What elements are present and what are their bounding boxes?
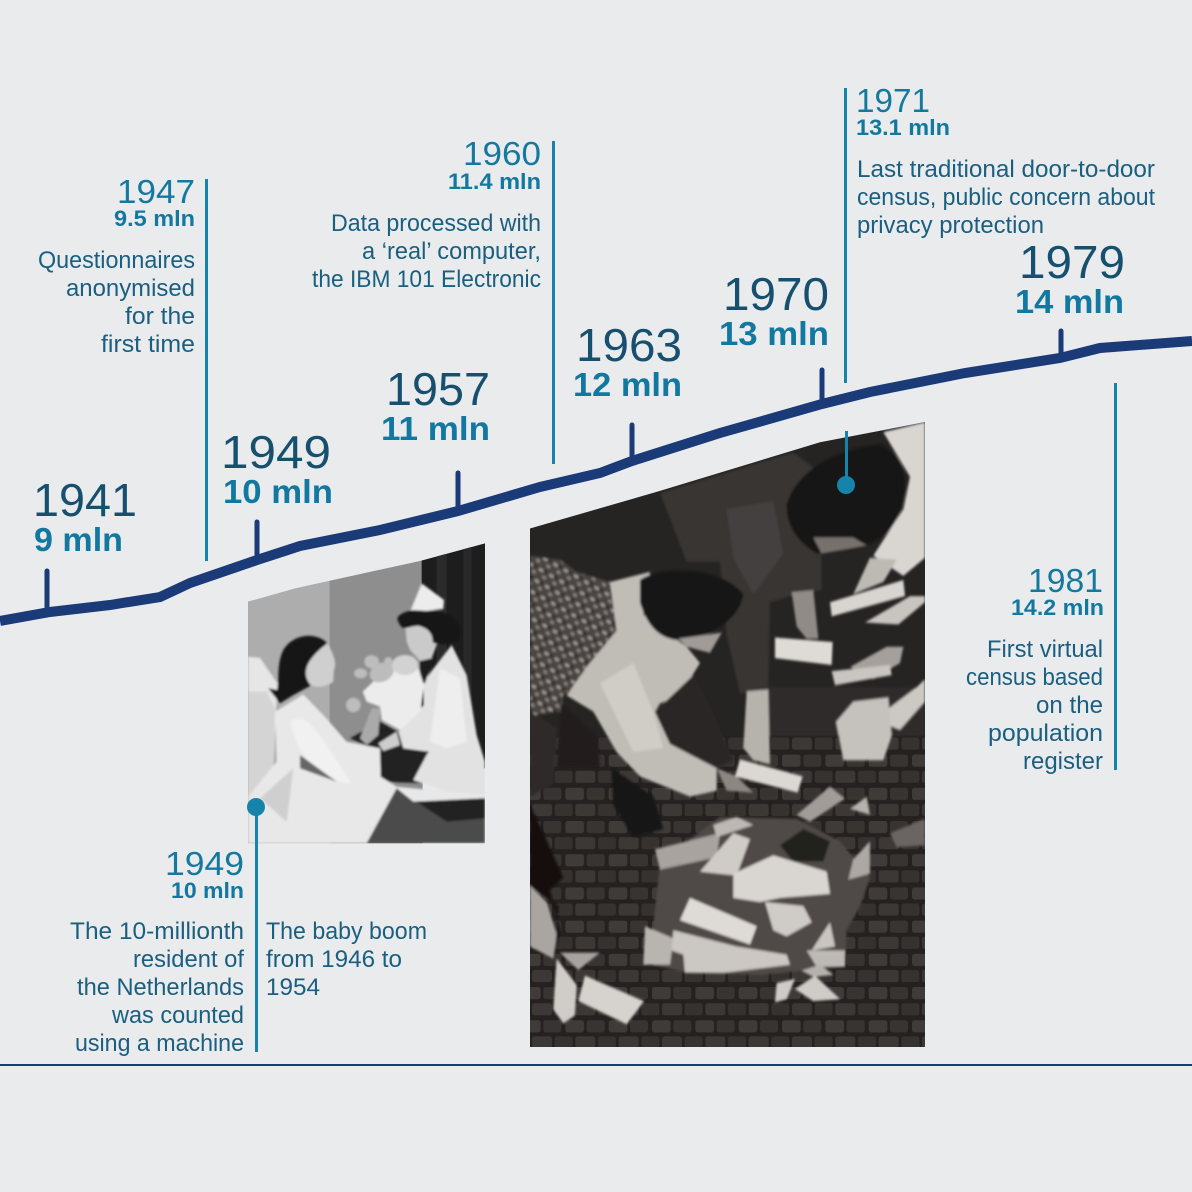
milestone 1979 [1015,236,1125,320]
text block baby boom [266,918,427,1001]
text block 1981: First virtual [987,636,1103,663]
text block baby boom: 1954 [266,974,320,1001]
text block 1971: 13.1 mln [856,115,950,140]
milestone 1979: 1979 [1019,236,1125,288]
callout line 1960 [552,141,555,464]
text block baby boom: from 1946 to [266,946,402,973]
text block 1949 ten-millionth resident: The 10-millionth [70,918,244,945]
milestone 1963 [573,319,682,403]
text block 1981 [966,562,1104,775]
text block 1949 ten-millionth resident: resident of [133,946,244,973]
text block 1981: register [1023,748,1103,775]
milestone 1941 [33,474,137,558]
milestone 1957: 11 mln [381,410,490,447]
milestone 1970: 1970 [723,268,829,320]
text block 1947: first time [101,331,195,358]
milestone 1957: 1957 [386,363,490,415]
text block baby boom: The baby boom [266,918,427,945]
milestone 1949: 10 mln [223,473,333,510]
text block 1960: Data processed with [331,210,541,237]
text block 1971: privacy protection [857,212,1044,239]
text block 1960 [312,135,541,293]
text block 1960: 1960 [463,135,541,172]
callout line and dot 1949 on photo [247,798,265,1052]
milestone 1941: 1941 [33,474,137,526]
photo: burning census forms [520,420,935,1052]
milestone 1970 [719,268,829,352]
rising population line [0,341,1192,621]
milestone 1979: 14 mln [1015,283,1124,320]
text block 1981: on the [1036,692,1103,719]
milestone 1941: 9 mln [34,521,123,558]
text block 1971: census, public concern about [857,184,1155,211]
text block 1947: for the [125,303,195,330]
text block 1949 ten-millionth resident: the Netherlands [77,974,244,1001]
milestone 1949 [221,426,333,510]
text block 1947: anonymised [66,275,195,302]
text block 1981: 14.2 mln [1011,595,1104,620]
text block 1947: 9.5 mln [114,206,195,231]
callout line and dot 1971 on photo [837,431,855,494]
text block 1947: 1947 [117,173,195,210]
text block 1960: the IBM 101 Electronic [312,266,541,293]
text block 1960: 11.4 mln [448,169,541,194]
text block 1949 ten-millionth resident: was counted [111,1002,244,1029]
milestone 1970: 13 mln [719,315,829,352]
callout line 1947 [205,179,208,561]
text block 1960: a ‘real’ computer, [362,238,541,265]
milestone 1949: 1949 [221,426,331,478]
milestone 1963: 12 mln [573,366,682,403]
text block 1949 ten-millionth resident [70,845,244,1057]
text block 1949 ten-millionth resident: 10 mln [171,878,244,903]
text block 1971 [856,82,1155,239]
baseline axis [0,1064,1192,1066]
text block 1971: 1971 [856,82,930,119]
milestone 1963: 1963 [576,319,682,371]
text block 1981: population [988,720,1103,747]
callout line 1981 [1114,383,1117,770]
tick marks on the line [47,331,1061,610]
text block 1949 ten-millionth resident: using a machine [75,1030,244,1057]
text block 1981: census based [966,664,1103,691]
text block 1947 [38,173,195,358]
text block 1949 ten-millionth resident: 1949 [165,845,244,882]
callout line 1971 [844,88,847,383]
text block 1947: Questionnaires [38,247,195,274]
text block 1981: 1981 [1028,562,1103,599]
photo: mother, nurse and baby [248,535,487,845]
milestone 1957 [381,363,490,447]
text block 1971: Last traditional door-to-door [857,156,1155,183]
